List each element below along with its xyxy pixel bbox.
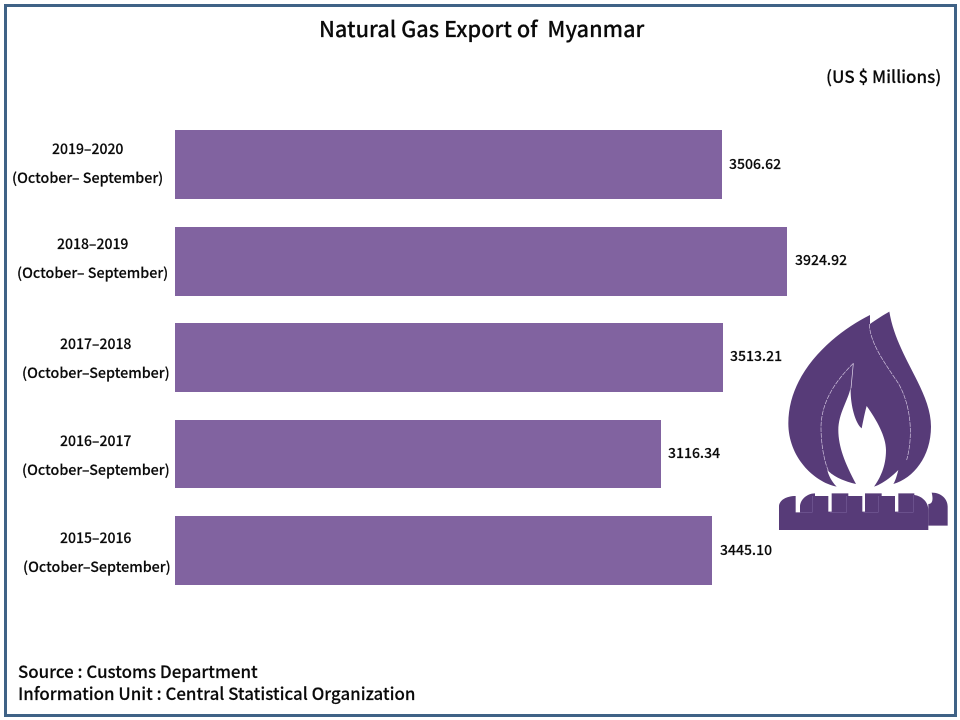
- burner: [779, 493, 948, 530]
- row 2017-2018: 3513.21: [730, 346, 782, 366]
- row 2016-2017: (October–September): [22, 459, 170, 480]
- icon: gas flame on burner: [779, 312, 948, 530]
- row 2017-2018: 2017–2018: [60, 334, 131, 354]
- row 2018-2019: (October– September): [17, 262, 168, 283]
- row 2016-2017: 2016–2017: [60, 430, 131, 450]
- bar chart: [12, 130, 847, 585]
- title: Natural Gas Export of Myanmar: [319, 12, 644, 44]
- row 2018-2019: 3924.92: [795, 250, 847, 270]
- row 2017-2018: (October–September): [22, 362, 170, 383]
- row 2018-2019: [17, 227, 847, 296]
- row 2017-2018: [22, 323, 782, 392]
- row 2019-2020: 3506.62: [729, 154, 781, 174]
- row 2015-2016: 3445.10: [720, 540, 772, 560]
- row 2016-2017: 3116.34: [668, 442, 720, 462]
- row 2015-2016: [23, 516, 772, 585]
- row 2019-2020: [12, 130, 781, 199]
- row 2019-2020: (October– September): [12, 167, 163, 188]
- row 2016-2017: [22, 420, 720, 488]
- source note: Source : Customs Department Information Unit : Central Statistical Organization: [18, 658, 415, 705]
- row 2015-2016: (October–September): [23, 556, 171, 577]
- unit label: (US $ Millions): [826, 63, 941, 88]
- row 2015-2016: 2015–2016: [60, 528, 131, 548]
- row 2019-2020: 2019–2020: [52, 138, 123, 158]
- flame: [788, 312, 931, 487]
- row 2018-2019: 2018–2019: [57, 234, 128, 254]
